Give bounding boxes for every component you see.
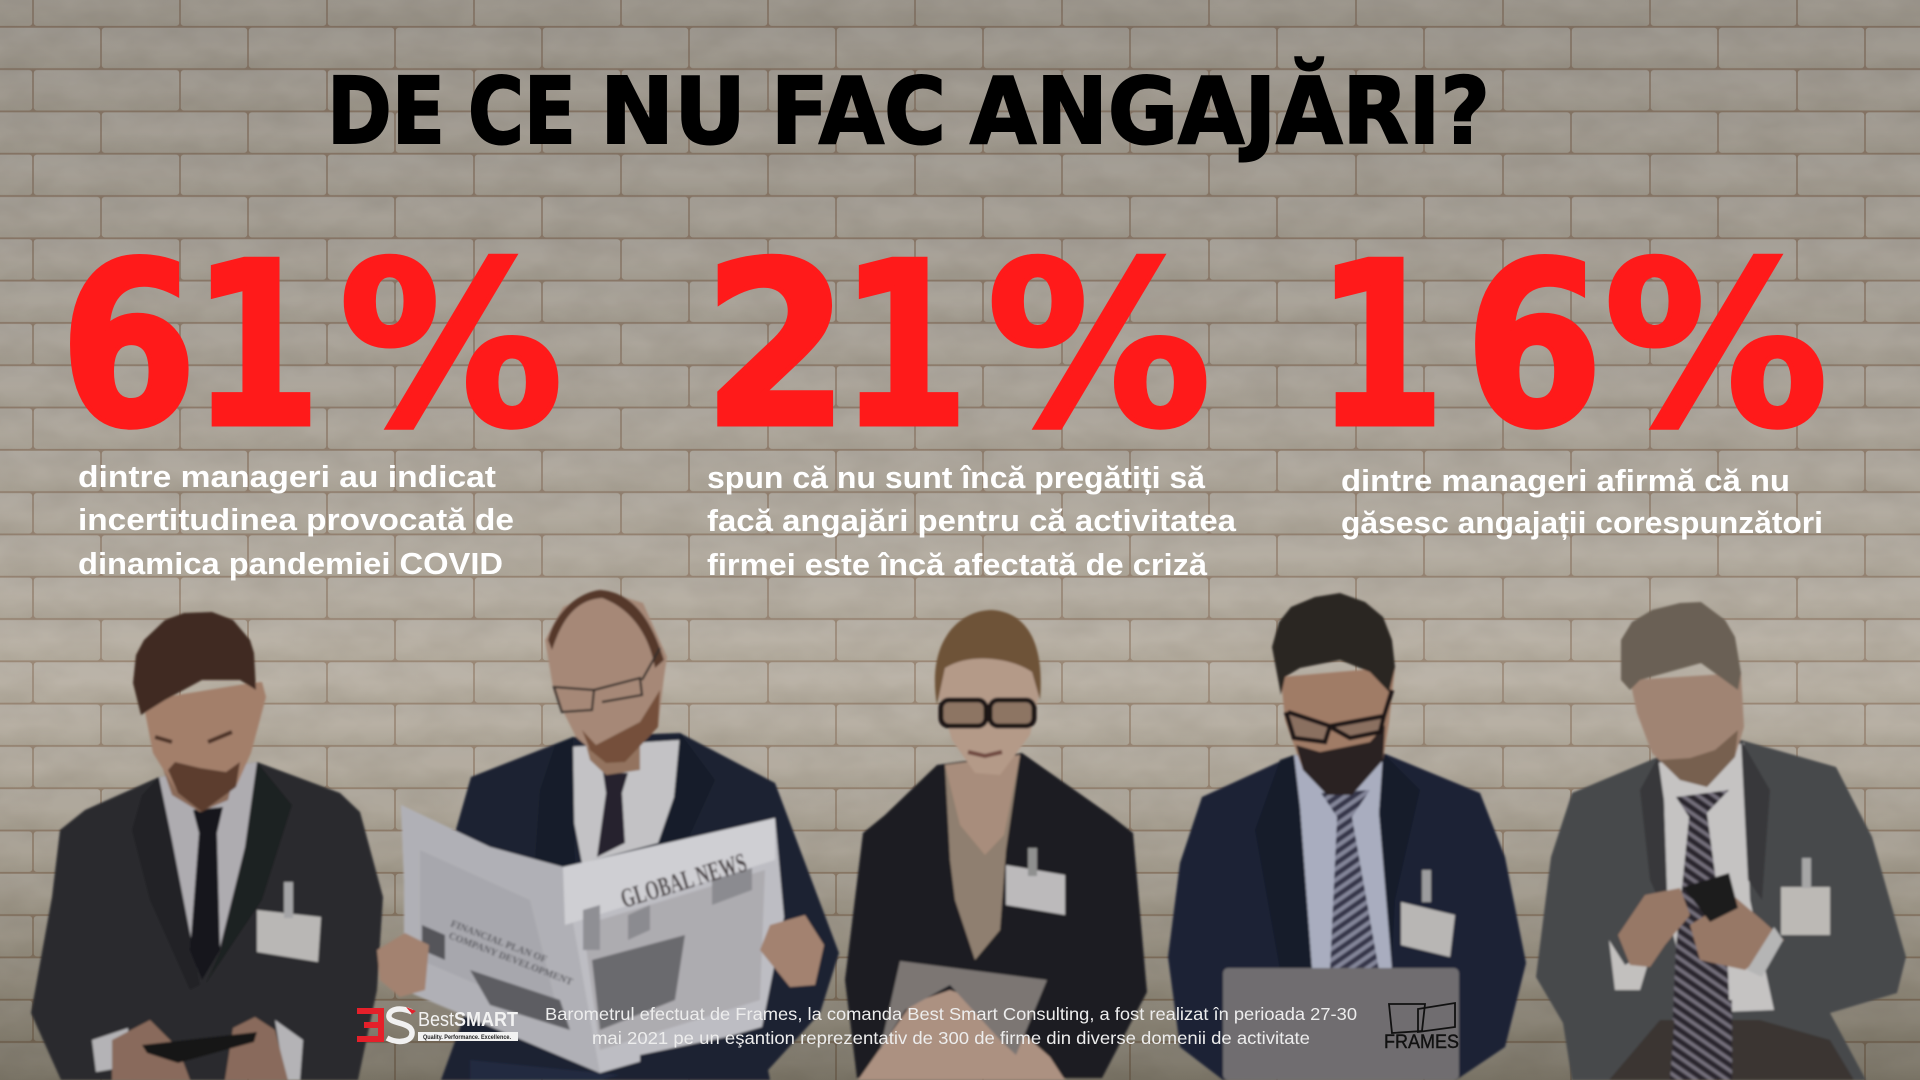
text: 21% description: spun că nu sunt încă pregătiți să <box>707 460 1206 495</box>
statistic: 21%: 1 <box>840 215 969 478</box>
statistic: 16% <box>1316 215 1828 478</box>
title: DE <box>327 58 445 165</box>
person 5: man in grey suit with phone <box>1536 602 1906 1080</box>
text: 21% description <box>707 460 1237 582</box>
text: 16% description <box>1341 463 1823 540</box>
logo: Best Smart <box>357 1007 518 1041</box>
footnote: Barometrul efectuat de Frames, la comanda Best Smart Consulting, a fost realizat în perioada 27-30 <box>545 1004 1357 1024</box>
logo: Frames: FRAMES <box>1384 1032 1459 1053</box>
text: 61% description: dintre manageri au indicat <box>78 459 496 494</box>
person 4: man with laptop <box>1168 593 1526 1080</box>
statistic: 16%: 1 <box>1316 215 1445 478</box>
statistic: 61%: 1 <box>192 215 321 478</box>
title: NU <box>600 58 746 165</box>
person 2: man reading newspaper: COMPANY DEVELOPMENT <box>447 931 574 988</box>
statistic: 21% <box>703 215 1211 478</box>
text: 61% description: incertitudinea provocată de <box>78 502 514 537</box>
statistic: 61% <box>60 215 563 478</box>
statistic: 21%: % <box>987 215 1211 478</box>
title <box>327 56 1490 165</box>
person 2: man reading newspaper: GLOBAL NEWS <box>617 847 750 914</box>
statistic: 16%: 6 <box>1465 215 1603 478</box>
statistic: 61%: 6 <box>60 215 197 478</box>
logo: Best Smart: BestSMART <box>418 1009 518 1031</box>
person 2: man reading newspaper <box>377 590 839 1080</box>
person 3: woman with clipboard <box>845 610 1147 1080</box>
text: 21% description: facă angajări pentru că activitatea <box>707 503 1237 538</box>
footnote: mai 2021 pe un eşantion reprezentativ de 300 de firme din diverse domenii de activitate <box>592 1028 1310 1048</box>
text: 61% description <box>78 459 514 581</box>
text: 16% description: dintre manageri afirmă că nu <box>1341 463 1790 498</box>
text: 61% description: dinamica pandemiei COVID <box>78 546 503 581</box>
statistic: 61%: % <box>339 215 563 478</box>
text: 21% description: firmei este încă afectată de criză <box>707 547 1208 582</box>
people row photo <box>31 590 1906 1080</box>
logo: Frames <box>1384 1003 1459 1053</box>
person 2: man reading newspaper: FINANCIAL PLAN OF <box>449 919 548 965</box>
title: ANGAJĂRI? <box>970 56 1490 165</box>
statistic: 16%: % <box>1604 215 1828 478</box>
statistic: 21%: 2 <box>703 215 849 478</box>
footnote <box>545 1004 1357 1048</box>
logo: Best Smart: Quality. Performance. Excellence. <box>423 1034 511 1041</box>
title: CE <box>468 58 576 165</box>
text: 16% description: găsesc angajații corespunzători <box>1341 505 1823 540</box>
title: FAC <box>771 58 946 165</box>
person 1: man with phone <box>31 612 383 1080</box>
